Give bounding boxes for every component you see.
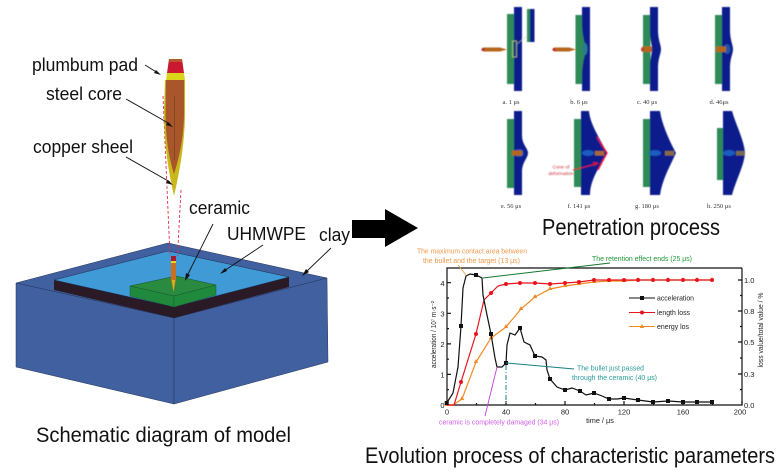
legend: acceleration — [657, 294, 694, 302]
frame h — [717, 111, 745, 195]
callout: bullet passed ceramic: The bullet just passed — [577, 364, 644, 372]
right axis labels: 0.8 — [744, 307, 754, 316]
callout: retention effect: The retention effect ends (25 μs) — [592, 254, 692, 263]
small bullet — [171, 256, 176, 292]
ceramic plate — [130, 276, 216, 307]
label: clay: clay — [319, 224, 351, 245]
frame captions: g. 180 μs — [635, 203, 659, 210]
arrow: ceramic — [185, 224, 213, 281]
right axis labels — [744, 276, 754, 410]
right axis labels: 0.0 — [744, 401, 754, 410]
caption: schematic diagram: Schematic diagram of model — [36, 424, 291, 447]
label: steel core: steel core — [46, 83, 122, 104]
x axis labels: 80 — [561, 408, 569, 416]
frame captions: f. 141 μs — [568, 203, 591, 210]
callout: maximum contact area: The maximum contact area between — [417, 246, 527, 256]
frame captions: e. 56 μs — [501, 203, 522, 210]
left axis title: acceleration / 10⁷ m·s⁻² — [431, 300, 438, 368]
frame captions: h. 250 μs — [707, 203, 731, 210]
frame c — [641, 7, 661, 91]
panel: penetration process — [482, 7, 745, 240]
callout: bullet passed ceramic: through the ceramic (40 μs) — [572, 373, 657, 382]
frame f — [548, 111, 607, 195]
frames — [482, 7, 745, 195]
right axis labels: 1.0 — [744, 276, 754, 285]
series: length loss — [447, 278, 714, 405]
frame captions: b. 6 μs — [570, 99, 588, 106]
label: UHMWPE: UHMWPE — [227, 223, 306, 244]
arrow: UHMWPE — [220, 245, 263, 274]
right axis labels: 0.3 — [744, 370, 754, 379]
UHMWPE plate — [54, 251, 289, 318]
x axis labels: 120 — [618, 408, 630, 416]
arrow: copper sheel — [126, 157, 173, 185]
clay block — [16, 243, 328, 404]
series: acceleration — [445, 273, 714, 405]
left axis labels: 1 — [440, 370, 444, 380]
label: ceramic: ceramic — [189, 197, 250, 218]
frame b — [552, 7, 590, 91]
frame f: Cone of — [553, 164, 570, 170]
guide lines from bullet — [163, 96, 181, 256]
callout: retention effect — [483, 254, 692, 278]
right axis labels: 0.5 — [744, 338, 754, 347]
left axis labels: 4 — [440, 279, 444, 288]
arrow: big black — [352, 209, 418, 247]
callout: maximum contact area — [417, 246, 527, 275]
frame captions: d. 46μs — [709, 99, 729, 106]
legend: length loss — [657, 308, 690, 317]
x axis labels: 200 — [734, 408, 746, 416]
frame f: deformation — [548, 171, 574, 177]
arrow: clay — [302, 248, 331, 276]
left axis labels: 0 — [440, 401, 444, 410]
panel: line chart — [365, 246, 775, 468]
arrow: steel core — [126, 99, 173, 127]
label: plumbum pad: plumbum pad — [32, 54, 138, 75]
chart axes — [447, 268, 742, 405]
left axis labels — [440, 279, 444, 410]
x axis labels: 40 — [502, 408, 510, 416]
callout: maximum contact area: the bullet and the target (13 μs) — [423, 256, 520, 265]
x axis labels: 0 — [445, 408, 449, 416]
x axis labels: 160 — [677, 408, 689, 416]
legend — [629, 294, 694, 331]
frame captions — [501, 99, 731, 210]
left axis labels: 2 — [440, 340, 444, 349]
frame captions: c. 40 μs — [637, 99, 658, 106]
callout: ceramic damaged: ceramic is completely damaged (34 μs) — [439, 418, 559, 426]
series: energy loss — [445, 277, 714, 406]
x axis labels — [445, 408, 746, 416]
panel: schematic model — [16, 54, 351, 447]
frame g — [643, 111, 676, 195]
frame d — [715, 7, 733, 91]
legend: energy los — [657, 322, 689, 331]
x axis title: time / μs — [586, 416, 614, 425]
large bullet — [164, 59, 185, 196]
right axis title: loss value/total value / % — [758, 292, 765, 368]
frame captions: a. 1 μs — [502, 99, 520, 106]
caption: penetration process: Penetration process — [542, 214, 720, 240]
arrow: plumbum pad — [145, 65, 161, 75]
frame e — [507, 111, 528, 195]
label: copper sheel: copper sheel — [33, 136, 133, 157]
callout: bullet passed ceramic — [506, 363, 657, 405]
callout: ceramic damaged — [439, 367, 559, 426]
frame a — [482, 7, 534, 91]
left axis labels: 3 — [440, 310, 444, 318]
